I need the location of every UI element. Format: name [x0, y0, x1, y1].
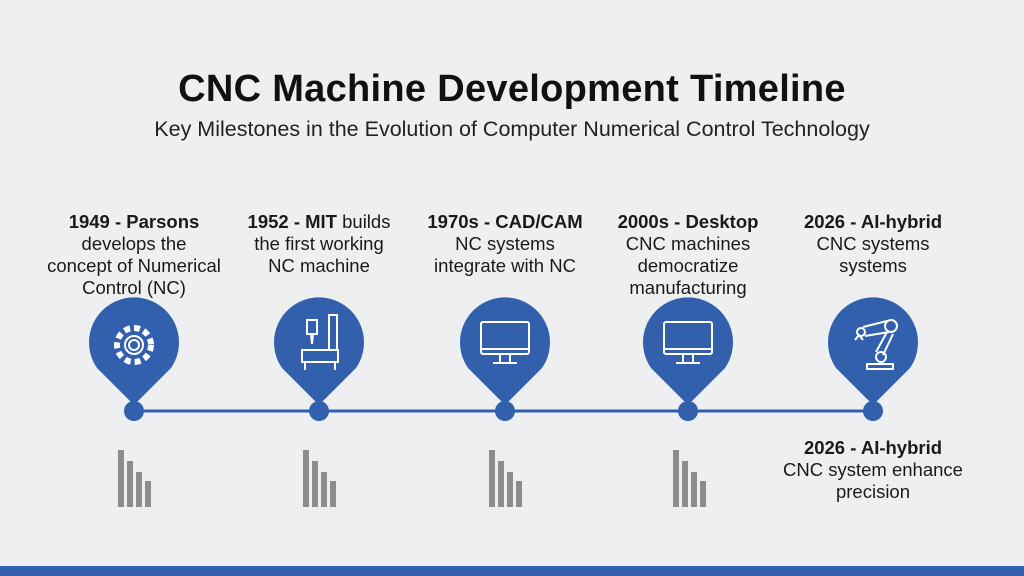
milestone 4 text: manufacturing	[629, 277, 747, 298]
bottom bar	[0, 566, 1024, 576]
pin 5: robot arm	[828, 297, 918, 421]
milestone 2 text: 1952 - MIT builds	[248, 211, 390, 232]
subtitle: Key Milestones in the Evolution of Computer Numerical Control Technology	[154, 117, 870, 141]
milestone 3 text	[427, 211, 583, 276]
milestone 5 bottom text: CNC system enhance	[783, 459, 963, 480]
title: CNC Machine Development Timeline	[178, 68, 846, 110]
milestone 2 text: NC machine	[268, 255, 370, 276]
milestone 5 bottom text: 2026 - AI-hybrid	[804, 437, 942, 458]
milestone 1 text	[47, 211, 221, 298]
pin 4: desktop monitor	[643, 297, 733, 421]
bar icons	[118, 450, 706, 507]
milestone 1 text: Control (NC)	[82, 277, 186, 298]
milestone 5 bottom text: precision	[836, 481, 910, 502]
milestone 5 bottom text	[783, 437, 963, 502]
milestone 3 text: 1970s - CAD/CAM	[427, 211, 583, 232]
milestone 1 text: develops the	[82, 233, 186, 254]
milestone 4 text	[618, 211, 758, 298]
milestone 5 text: systems	[839, 255, 907, 276]
pin 1: gear	[89, 297, 179, 421]
timeline line	[134, 410, 873, 412]
pin 3: CAD monitor	[460, 297, 550, 421]
milestone 5 text: CNC systems	[816, 233, 930, 254]
milestone 1 text: concept of Numerical	[47, 255, 221, 276]
milestone 2 text: the first working	[254, 233, 384, 254]
milestone 2 text	[248, 211, 390, 276]
milestone 4 text: CNC machines	[626, 233, 750, 254]
milestone 4 text: democratize	[638, 255, 738, 276]
milestone 5 text	[804, 211, 942, 276]
milestone 3 text: NC systems	[455, 233, 555, 254]
milestone 3 text: integrate with NC	[434, 255, 576, 276]
pin 2: NC machine	[274, 297, 364, 421]
milestone 4 text: 2000s - Desktop	[618, 211, 758, 232]
milestone 5 text: 2026 - AI-hybrid	[804, 211, 942, 232]
milestone 1 text: 1949 - Parsons	[69, 211, 199, 232]
